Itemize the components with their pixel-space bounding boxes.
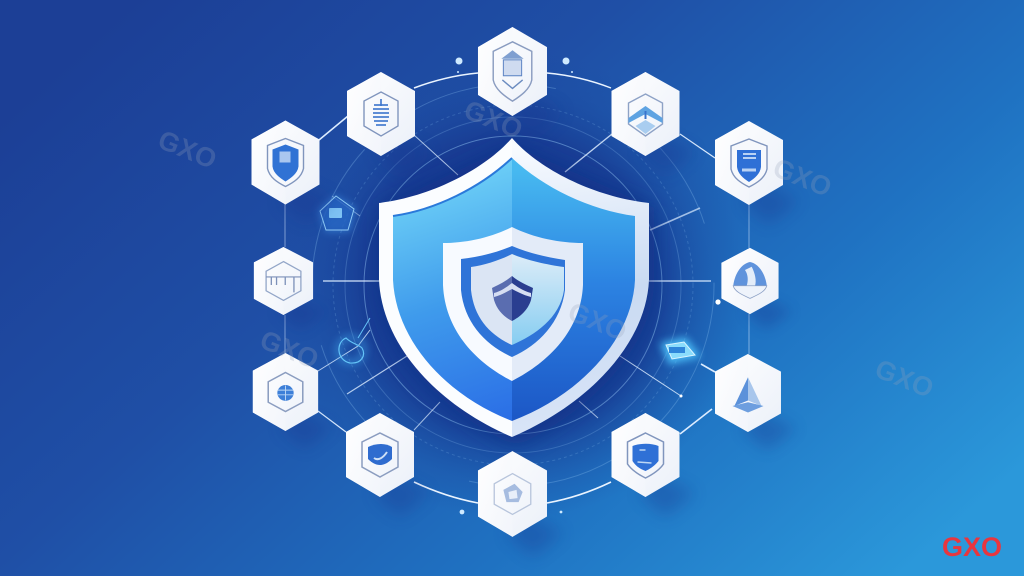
shield inner blue layer xyxy=(461,246,565,357)
watermark GXO marks: GXO xyxy=(256,325,323,375)
hexagon node: upper left xyxy=(347,72,431,176)
shield blue body xyxy=(393,158,635,421)
hexagon node: lower right xyxy=(715,354,796,451)
hexagon node: middle left xyxy=(254,247,327,331)
hexagon node: upper right xyxy=(612,72,696,176)
icon: glowing card node xyxy=(660,337,701,365)
hexagon node: bottom left xyxy=(346,413,430,517)
logo mark: GXO: GXO xyxy=(942,532,1002,562)
watermark GXO marks: GXO xyxy=(564,297,631,347)
hexagon node: lower left xyxy=(253,353,334,450)
hexagon node: far upper right xyxy=(715,121,799,225)
hexagon node: far upper left xyxy=(252,120,336,224)
sparkle dots xyxy=(456,58,721,514)
hexagon node: top xyxy=(478,27,563,137)
shield core xyxy=(492,276,533,321)
hexagon node: middle right xyxy=(721,248,792,330)
watermark GXO marks xyxy=(154,95,938,404)
hexagon node: bottom xyxy=(478,451,563,557)
dark halo behind shield xyxy=(277,50,747,520)
shield shadow xyxy=(380,145,654,446)
icon: glowing pentagon node xyxy=(318,195,356,232)
shield inner white frame xyxy=(443,227,583,381)
icon: glowing ring node xyxy=(338,318,370,363)
shield light layer xyxy=(471,254,564,345)
central shield xyxy=(379,138,649,437)
watermark GXO marks: GXO xyxy=(871,354,938,404)
shield outer white frame xyxy=(379,138,649,437)
hexagon node: bottom right xyxy=(612,413,696,517)
watermark GXO marks: GXO xyxy=(769,153,836,203)
watermark GXO marks: GXO xyxy=(154,125,221,175)
orbit rings xyxy=(312,73,714,503)
watermark GXO marks: GXO xyxy=(460,95,527,145)
connector lines xyxy=(285,116,749,434)
